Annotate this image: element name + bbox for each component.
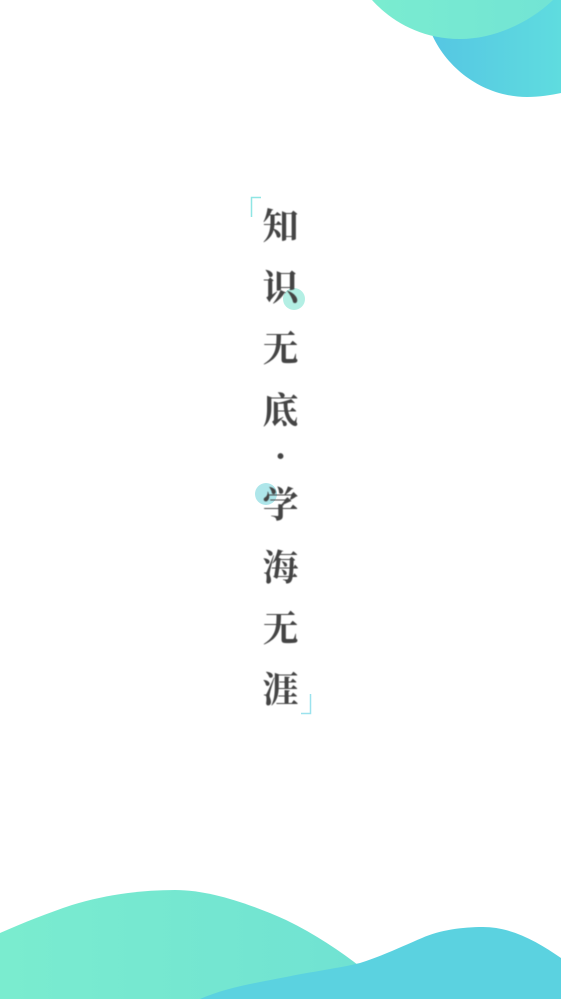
bottom-right decorative blue hill bbox=[200, 927, 561, 999]
vertical title text: 涯 bbox=[262, 670, 299, 710]
accent dot behind 识 bbox=[283, 288, 305, 310]
top-right decorative green wave bbox=[372, 0, 553, 39]
vertical title text bbox=[262, 206, 301, 710]
opening corner bracket bbox=[252, 198, 261, 217]
closing corner bracket bbox=[301, 694, 310, 714]
vertical title text: 底 bbox=[262, 391, 299, 431]
bottom-left decorative green hill bbox=[0, 890, 362, 999]
vertical title text: 海 bbox=[262, 548, 299, 588]
vertical title text: · bbox=[274, 436, 287, 476]
top-right decorative blue wave bbox=[430, 0, 561, 97]
vertical title text: 识 bbox=[262, 268, 301, 308]
vertical title text: 无 bbox=[262, 329, 299, 369]
vertical title text: 无 bbox=[262, 609, 299, 649]
vertical title text: 知 bbox=[262, 206, 299, 246]
vertical title text: 学 bbox=[262, 485, 299, 525]
accent dot beside 学 bbox=[255, 483, 277, 505]
